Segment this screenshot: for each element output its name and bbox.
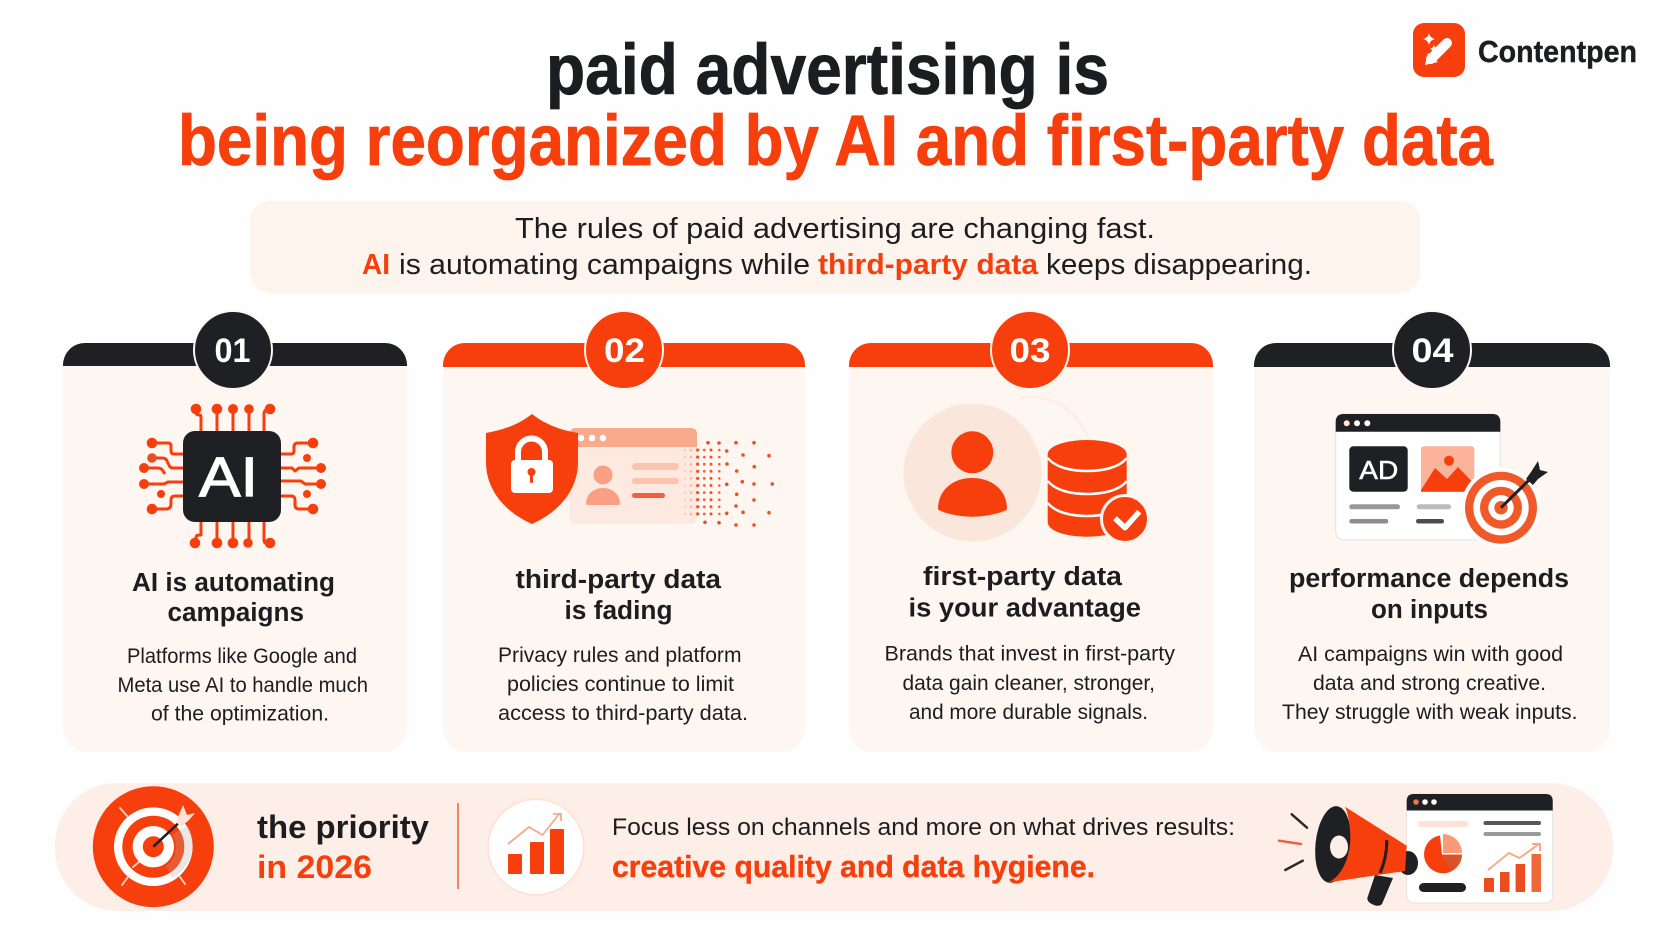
- card 01 body text: Platforms like Google and: [127, 645, 357, 668]
- number badge 01: [194, 311, 272, 389]
- intro panel: AI: [362, 249, 390, 281]
- number badge 03: [991, 311, 1069, 389]
- number badge 01: 01: [214, 332, 250, 370]
- card 01 heading: [132, 569, 335, 627]
- card 01 heading: campaigns: [168, 599, 304, 627]
- card 03 body text: [884, 642, 1175, 724]
- panel: card 01 AI is automating campaigns: [63, 311, 407, 752]
- number badge 02: [585, 311, 663, 389]
- intro panel: third-party data: [818, 249, 1039, 281]
- takeaway text: creative quality and data hygiene.: [612, 849, 1095, 884]
- intro panel: The rules of paid advertising are changing fast.: [515, 213, 1155, 245]
- card 02 heading: third-party data: [516, 566, 722, 594]
- card 02 body text: Privacy rules and platform: [498, 644, 742, 667]
- priority heading: [257, 809, 429, 885]
- card 04 body text: [1282, 643, 1578, 724]
- title: [178, 31, 1493, 181]
- card 04 body text: data and strong creative.: [1313, 672, 1546, 695]
- card 03 heading: [908, 563, 1141, 622]
- icon: person and database: [904, 397, 1148, 542]
- takeaway text: Focus less on channels and more on what drives results:: [612, 814, 1235, 841]
- logo: Contentpen: Contentpen: [1478, 34, 1637, 69]
- number badge 04: 04: [1412, 332, 1454, 370]
- logo: Contentpen: [1413, 23, 1637, 77]
- card 02 body text: [498, 644, 748, 725]
- number badge 02: 02: [604, 332, 645, 370]
- card 02 heading: [516, 566, 722, 625]
- priority heading: the priority: [257, 809, 429, 845]
- icon: ad window and target: [1336, 414, 1548, 548]
- card 02 body text: policies continue to limit: [507, 673, 734, 696]
- title: paid advertising is: [546, 31, 1109, 110]
- card 03 heading: first-party data: [923, 563, 1123, 591]
- intro panel: is automating campaigns while: [399, 249, 810, 281]
- icon: AI chip: AI: [199, 445, 258, 508]
- icon: megaphone: [1279, 804, 1418, 906]
- card 03 body text: Brands that invest in first-party: [884, 642, 1175, 666]
- intro panel: [250, 201, 1420, 293]
- intro panel: keeps disappearing.: [1046, 249, 1312, 281]
- number badge 03: 03: [1010, 332, 1050, 370]
- card 04 heading: [1289, 565, 1569, 624]
- card 04 heading: on inputs: [1371, 596, 1488, 624]
- number badge 04: [1393, 311, 1471, 389]
- icon: growth chart: [488, 799, 584, 895]
- card 02 heading: is fading: [564, 597, 672, 625]
- panel: card 03 first-party data is your advantage: [849, 311, 1213, 752]
- panel: card 02 third-party data is fading: [443, 311, 805, 752]
- card 04 body text: AI campaigns win with good: [1298, 643, 1563, 666]
- title: being reorganized by AI and first-party data: [178, 102, 1493, 181]
- icon: shield, profile window and dissolving data: [486, 414, 772, 525]
- takeaway text: [612, 814, 1235, 884]
- card 01 heading: AI is automating: [132, 569, 335, 597]
- priority heading: in 2026: [257, 849, 372, 885]
- panel: priority banner: [55, 783, 1613, 911]
- card 01 body text: of the optimization.: [151, 702, 329, 726]
- panel: card 04 performance depends on inputs: [1254, 311, 1610, 752]
- card 03 heading: is your advantage: [908, 594, 1141, 622]
- card 01 body text: Meta use AI to handle much: [118, 674, 368, 697]
- card 03 body text: and more durable signals.: [909, 701, 1148, 724]
- card 04 body text: They struggle with weak inputs.: [1282, 701, 1578, 724]
- card 02 body text: access to third-party data.: [498, 702, 748, 725]
- icon: analytics dashboard window: [1407, 794, 1553, 903]
- card 01 body text: [118, 645, 368, 726]
- card 03 body text: data gain cleaner, stronger,: [902, 672, 1155, 695]
- icon: target with dart: [93, 786, 214, 907]
- icon: ad window and target: AD: [1359, 455, 1398, 485]
- card 04 heading: performance depends: [1289, 565, 1569, 593]
- icon: AI chip: [139, 404, 326, 548]
